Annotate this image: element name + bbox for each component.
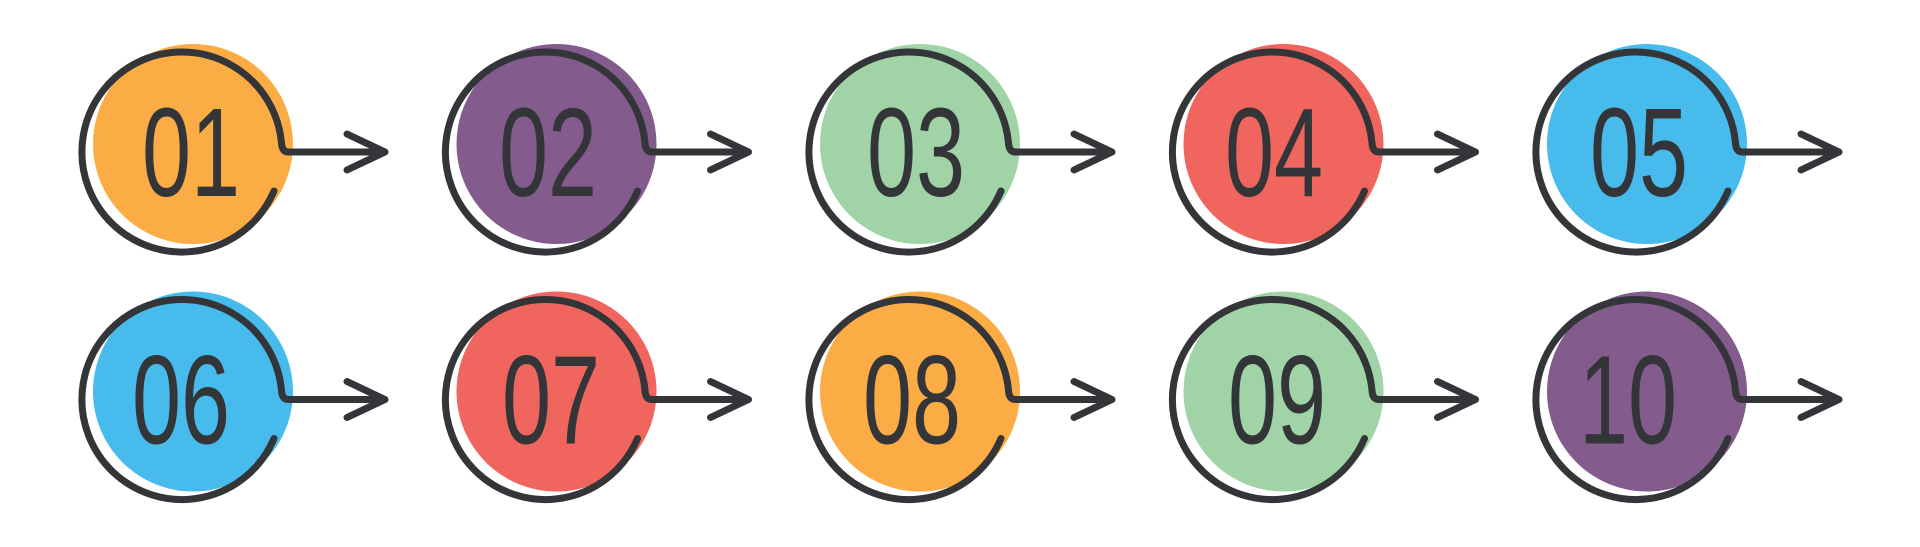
item 10: purple circle with arrow: 10 <box>1579 331 1677 471</box>
item 02: purple circle with arrow: 02 <box>499 84 597 224</box>
item 09: green circle with arrow <box>1172 292 1476 500</box>
item 08: orange circle with arrow: 08 <box>863 331 961 471</box>
item 07: red circle with arrow <box>445 292 748 500</box>
item 04: red circle with arrow: 04 <box>1225 84 1323 224</box>
item 01: orange circle with arrow: 01 <box>142 84 240 224</box>
item 07: red circle with arrow: 07 <box>502 331 600 471</box>
item 05: blue circle with arrow: 05 <box>1590 84 1688 224</box>
item 06: blue circle with arrow: 06 <box>132 331 230 471</box>
item 09: green circle with arrow: 09 <box>1228 331 1326 471</box>
item 10: purple circle with arrow <box>1536 292 1839 500</box>
item 05: blue circle with arrow <box>1536 44 1839 252</box>
item 03: green circle with arrow: 03 <box>867 84 965 224</box>
item 03: green circle with arrow <box>809 44 1112 252</box>
item 02: purple circle with arrow <box>445 44 748 252</box>
item 01: orange circle with arrow <box>82 44 385 252</box>
item 06: blue circle with arrow <box>82 292 385 500</box>
item 04: red circle with arrow <box>1172 44 1476 252</box>
item 08: orange circle with arrow <box>809 292 1112 500</box>
